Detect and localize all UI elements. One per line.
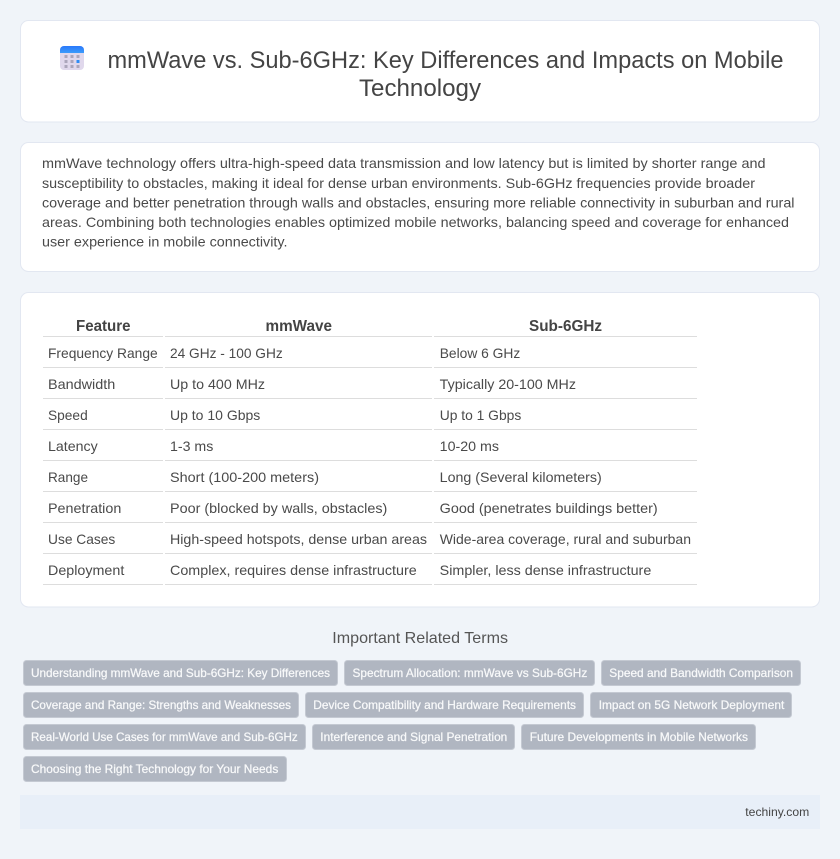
tag: [344, 660, 594, 686]
table row: Deployment: Deployment: [48, 562, 124, 578]
table row: Latency: 10-20 ms: [440, 438, 499, 454]
table row: Deployment: [43, 562, 697, 585]
table header: Feature: [76, 318, 131, 335]
tag: [522, 724, 756, 750]
tag: [24, 692, 298, 718]
table row: Deployment: Simpler, less dense infrastructure: [440, 562, 652, 578]
text block: summary: [42, 155, 795, 250]
heading: related terms: Important Related Terms: [332, 630, 508, 647]
footer: [20, 795, 820, 829]
table header: Sub-6GHz: [529, 318, 602, 335]
tag: Interference and Signal Penetration: [320, 730, 507, 744]
table row: Penetration: [43, 500, 697, 523]
table row: Frequency Range: Below 6 GHz: [440, 345, 520, 361]
title: [108, 47, 784, 102]
text block: summary: coverage and better penetration through walls and obstacles, ensuring more reliable connectivity in suburban and rural: [42, 194, 795, 210]
tag: Speed and Bandwidth Comparison: [609, 666, 793, 680]
tag: [306, 692, 584, 718]
tag: Impact on 5G Network Deployment: [599, 698, 785, 712]
table row: Bandwidth: Typically 20-100 MHz: [440, 376, 576, 392]
table row: Bandwidth: [43, 376, 697, 399]
table row: Penetration: Good (penetrates buildings better): [440, 500, 658, 516]
table row: Bandwidth: Bandwidth: [48, 376, 115, 392]
table row: Penetration: Penetration: [48, 500, 121, 516]
table row: Latency: 1-3 ms: [170, 438, 213, 454]
icon: calendar: [60, 46, 84, 70]
tag: [24, 756, 286, 782]
tag: [312, 724, 514, 750]
table row: Use Cases: High-speed hotspots, dense urban areas: [170, 531, 427, 547]
text block: summary: mmWave technology offers ultra-high-speed data transmission and low latency but is limited by shorter range and: [42, 155, 765, 171]
table row: Range: Short (100-200 meters): [170, 469, 319, 485]
text block: summary: susceptibility to obstacles, making it ideal for dense urban environments. Sub-6GHz frequencies provide broader: [42, 175, 755, 191]
footer: techiny.com: [745, 805, 809, 819]
panel: related term tags: [24, 660, 800, 782]
table row: Bandwidth: Up to 400 MHz: [170, 376, 265, 392]
tag: Spectrum Allocation: mmWave vs Sub-6GHz: [352, 666, 587, 680]
tag: Real-World Use Cases for mmWave and Sub-6GHz: [31, 730, 298, 744]
panel: title header: [20, 20, 820, 122]
table row: Speed: Up to 10 Gbps: [170, 407, 260, 423]
panel: comparison table: [20, 292, 820, 607]
table row: Range: [43, 469, 697, 492]
table header: [43, 318, 697, 337]
table row: Latency: [43, 438, 697, 461]
table row: Latency: Latency: [48, 438, 98, 454]
table row: Speed: Speed: [48, 407, 88, 423]
title: Technology: [359, 75, 481, 102]
table row: Frequency Range: 24 GHz - 100 GHz: [170, 345, 283, 361]
tag: [602, 660, 800, 686]
tag: Understanding mmWave and Sub-6GHz: Key Differences: [31, 666, 330, 680]
tag: Choosing the Right Technology for Your Needs: [31, 762, 278, 776]
table row: Speed: [43, 407, 697, 430]
table header: mmWave: [266, 318, 332, 335]
text block: summary: user experience in mobile connectivity.: [42, 234, 288, 250]
tag: [24, 660, 338, 686]
tag: [24, 724, 306, 750]
table row: Range: Long (Several kilometers): [440, 469, 602, 485]
table row: Use Cases: Wide-area coverage, rural and suburban: [440, 531, 691, 547]
tag: Device Compatibility and Hardware Requirements: [313, 698, 576, 712]
table row: Deployment: Complex, requires dense infrastructure: [170, 562, 417, 578]
tag: Coverage and Range: Strengths and Weaknesses: [31, 698, 291, 712]
panel: summary paragraph: [20, 142, 820, 272]
table row: Use Cases: Use Cases: [48, 531, 115, 547]
table row: Speed: Up to 1 Gbps: [440, 407, 521, 423]
text block: summary: areas. Combining both technologies enables optimized mobile networks, balancing speed and coverage for enhanced: [42, 214, 789, 230]
title: mmWave vs. Sub-6GHz: Key Differences and Impacts on Mobile: [108, 47, 784, 74]
table row: Frequency Range: [43, 345, 697, 368]
table row: Penetration: Poor (blocked by walls, obstacles): [170, 500, 387, 516]
table row: Use Cases: [43, 531, 697, 554]
table row: Range: Range: [48, 469, 88, 485]
table row: Frequency Range: Frequency Range: [48, 345, 158, 361]
tag: Future Developments in Mobile Networks: [530, 730, 748, 744]
tag: [590, 692, 792, 718]
